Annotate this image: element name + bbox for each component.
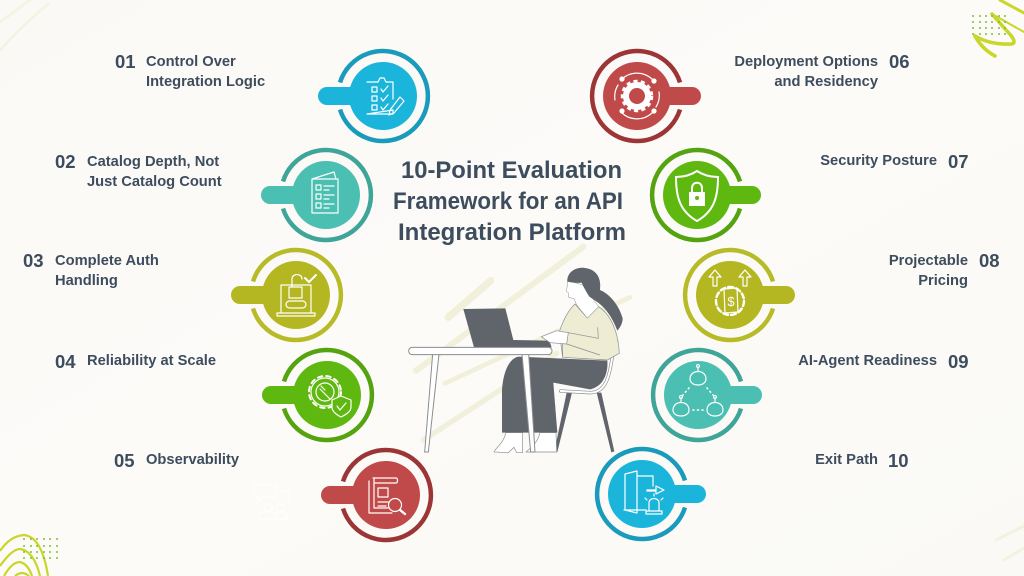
item 07 [652, 150, 969, 240]
item 08 [685, 250, 1000, 340]
illustration: woman working at a laptop [409, 247, 630, 453]
badge 03 [231, 250, 341, 340]
icon: gear with shield [309, 376, 351, 417]
item 09 [653, 350, 969, 440]
icon: shield with padlock [676, 171, 718, 221]
decoration: top-right scribble and dots [972, 0, 1024, 56]
sleeve lines [563, 327, 600, 357]
item 02 [55, 150, 371, 240]
title: Integration Platform [398, 219, 626, 246]
hand [541, 331, 568, 344]
item 05 [114, 450, 431, 540]
decoration: bottom-left rings and dots [0, 535, 58, 576]
number 02: 02 [55, 151, 76, 172]
icon: rising cost gear [709, 270, 751, 315]
label 04: Reliability at Scale [87, 353, 216, 369]
label 08: Pricing [918, 273, 968, 289]
laptop [463, 308, 552, 347]
desk [409, 347, 552, 452]
item 03 [23, 250, 341, 340]
title [393, 157, 626, 246]
hair [567, 268, 623, 331]
number 08: 08 [979, 250, 1000, 271]
icon: unlocked laptop [277, 274, 316, 316]
label 03: Complete Auth [55, 253, 159, 269]
number 05: 05 [114, 450, 135, 471]
label 09: AI-Agent Readiness [798, 353, 937, 369]
label 07: Security Posture [820, 153, 937, 169]
number 04: 04 [55, 351, 76, 372]
label 05: Observability [146, 452, 240, 468]
icon: exit door with arrow and alarm [624, 471, 664, 514]
number 09: 09 [948, 351, 969, 372]
label 01: Integration Logic [146, 74, 265, 90]
trousers [502, 357, 607, 433]
label 06: and Residency [774, 74, 879, 90]
title: 10-Point Evaluation [401, 157, 622, 184]
brush strokes behind the figure [416, 247, 630, 440]
icon: checklist and pencil [367, 78, 404, 115]
badge 08 [685, 250, 795, 340]
decoration: top-left scribble [0, 0, 48, 50]
label 06: Deployment Options [734, 54, 878, 70]
boots [494, 433, 557, 453]
title: Framework for an API [393, 188, 623, 215]
badge 02 [261, 150, 371, 240]
icon: catalog [312, 172, 338, 213]
number 03: 03 [23, 250, 44, 271]
item 04 [55, 350, 372, 440]
badge 07 [652, 150, 761, 240]
icon: connected agents [673, 364, 723, 416]
torso [559, 304, 619, 360]
badge 06 [592, 51, 701, 141]
number 01: 01 [115, 51, 136, 72]
icon: gear in orbit [615, 73, 659, 119]
icon: report with magnifier [369, 478, 405, 514]
number 10: 10 [888, 450, 909, 471]
label 08: Projectable [889, 253, 968, 269]
number 06: 06 [889, 51, 910, 72]
label 03: Handling [55, 273, 118, 289]
decoration: bottom-right scribble [996, 526, 1024, 560]
item 10 [597, 449, 909, 539]
badge 10 [597, 449, 706, 539]
chair [554, 341, 617, 452]
badge 01 [318, 51, 428, 141]
badge 05 [321, 450, 431, 540]
label 02: Just Catalog Count [87, 174, 222, 190]
item 01 [115, 51, 428, 141]
face and collar [566, 281, 599, 318]
item 06 [592, 51, 910, 141]
faint icon: chat and people [254, 485, 289, 519]
number 07: 07 [948, 151, 969, 172]
label 10: Exit Path [815, 452, 878, 468]
badge 04 [262, 350, 372, 440]
badge 08: $ [727, 294, 735, 309]
label 01: Control Over [146, 54, 236, 70]
badge 09 [653, 350, 762, 440]
label 02: Catalog Depth, Not [87, 154, 219, 170]
